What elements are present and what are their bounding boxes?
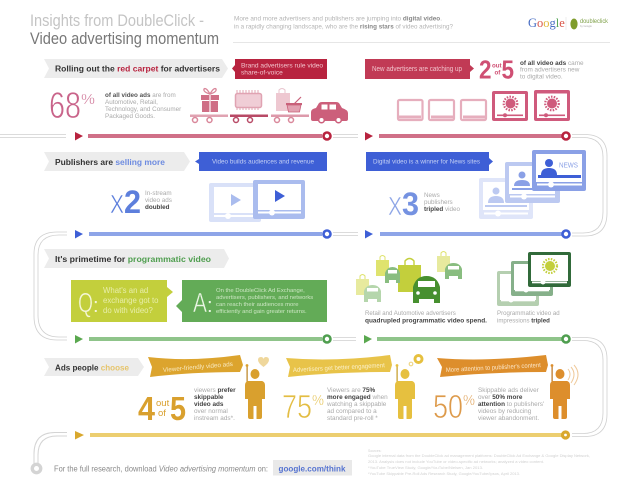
text: viewers more engaged: ad compared to a: [327, 408, 377, 415]
callout: news sites: Digital video is a winner for News sites: [373, 158, 481, 166]
text: 68% description: of all video ads are from: [105, 92, 176, 99]
text: skippable ads attention: videos by reducing: [478, 408, 532, 415]
text: viewers prefer: instream ads*.: [194, 415, 235, 422]
stat: 2 out of 5: [479, 54, 514, 84]
stat: 75%: %: [312, 392, 324, 409]
title: Insights from DoubleClick -: [30, 11, 204, 30]
intro text: [234, 16, 453, 30]
text: viewers prefer: skippable: [194, 394, 224, 401]
stat: x3: 3: [402, 186, 419, 222]
text: news publishers tripled: tripled video: [424, 206, 461, 213]
title: Video advertising momentum: [30, 29, 219, 48]
logo: DoubleClick: by Google: [580, 24, 592, 28]
sources: Sources:: [368, 449, 381, 453]
text: skippable ads attention: Skippable ads deliver: [478, 387, 540, 394]
panel: answer: A: [193, 287, 207, 318]
text: skippable ads attention: viewer abandonment.: [478, 415, 539, 422]
intro text: More and more advertisers and publishers are jumping into digital video.: [234, 16, 442, 22]
callout: new advertisers: [365, 59, 474, 79]
timeline: section 1: [75, 132, 570, 140]
logo: DoubleClick: [566, 17, 609, 30]
text: viewers more engaged: standard pre-roll *: [327, 415, 378, 422]
text: 2 out of 5 description: from advertisers new: [520, 66, 580, 74]
text: viewers prefer: viewers prefer: [194, 387, 236, 394]
banner: viewer-friendly: Viewer-friendly video ads: [163, 361, 233, 374]
text: impressions tripled: Programmatic video ad: [497, 310, 560, 317]
text: skippable ads attention: over 50% more: [478, 394, 523, 401]
end connector: [32, 432, 67, 473]
icon: person with gear: [395, 356, 422, 419]
icon: programmatic screens: [497, 252, 571, 306]
callout: news sites: [366, 152, 493, 171]
icon: person with sound waves: [550, 364, 578, 419]
text: impressions tripled: [497, 310, 560, 324]
callout: video builds audiences: Video builds audiences and revenue: [212, 158, 314, 166]
section 2 heading ribbon: [44, 152, 190, 171]
stat: x2: 2: [124, 184, 141, 220]
icon: news screens: [479, 150, 586, 219]
text: viewers more engaged: [326, 387, 388, 422]
banner: more attention: [437, 355, 548, 377]
text: in-stream doubled: video ads: [145, 197, 172, 204]
text: viewers prefer: video ads: [194, 401, 224, 408]
link: google.com/think: google.com/think: [278, 464, 346, 474]
panel: question: do with video?: [103, 306, 154, 315]
text: skippable ads attention: attention to publishers': [478, 401, 544, 408]
icon: gift on conveyor: [190, 89, 228, 122]
stat: 50%: %: [463, 392, 475, 409]
stat: 68%: %: [81, 91, 95, 108]
callout: brand advertisers: [232, 59, 327, 79]
panel: answer: advertisers, publishers, and networks: [216, 295, 313, 301]
stat: 4 out of 5: [138, 390, 186, 427]
timeline: section 3: [75, 335, 570, 344]
text: 2 out of 5 description: of all video ads came: [520, 60, 584, 67]
text: 2 out of 5 description: [520, 60, 584, 80]
text: quadrupled programmatic spend: [365, 310, 487, 324]
sources: Google internal data from the DoubleClick ad management platforms: DoubleClick Ad Exchange & Google Display Network,: [368, 454, 590, 458]
banner: viewer-friendly: [148, 355, 243, 377]
text: 68% description: Technology, and Consumer: [105, 106, 181, 113]
panel: answer: [176, 280, 327, 322]
panel: answer: can reach their audiences more: [216, 302, 299, 308]
callout: brand advertisers: share-of-voice: [241, 70, 283, 76]
footer call to action: For the full research, download Video advertising momentum on:: [54, 464, 268, 474]
text: skippable ads attention: [478, 387, 544, 422]
text: 2 out of 5 description: to digital video.: [520, 74, 563, 80]
sources: 2013. Analysis does not include YouTube or video-specific ad networks; analyzed a video content.: [368, 460, 544, 464]
section 1 heading ribbon: [44, 59, 228, 78]
text: in-stream doubled: [145, 190, 172, 211]
stat: 2 out of 5: 2: [479, 54, 492, 84]
sources: [368, 449, 590, 476]
stat: 4 out of 5: of: [158, 408, 166, 419]
banner: more attention: More attention to publisher's content: [446, 362, 541, 374]
stat: x2: [110, 184, 141, 220]
panel: question: :: [93, 295, 99, 317]
sources: *YouTube TrueView Study, Google/YouTube/Nielsen, Jan 2013.: [368, 466, 483, 470]
panel: question: [71, 280, 173, 322]
text: viewers more engaged: watching a skippable: [326, 401, 387, 408]
stat: 2 out of 5: out: [492, 62, 502, 70]
text: in-stream doubled: In-stream: [145, 190, 172, 197]
callout: brand advertisers: Brand advertisers rule video: [241, 62, 323, 70]
section 4 heading ribbon: Ads people choose: [55, 362, 129, 372]
stat: x2: X: [110, 189, 124, 219]
icon: person with heart: [245, 357, 269, 419]
intro text: in a rapidly changing landscape, who are the rising stars of video advertising?: [234, 24, 453, 30]
section 3 heading ribbon: [44, 249, 229, 268]
text: quadrupled programmatic spend: Retail and Automotive advertisers: [365, 310, 456, 317]
icon: shopping bags and cars: [356, 252, 462, 303]
text: viewers prefer: [194, 387, 236, 422]
stat: 75%: 75: [282, 388, 312, 425]
banner: better engagement: [286, 355, 392, 377]
text: quadrupled programmatic spend: quadrupled programmatic video spend.: [365, 318, 487, 324]
stat: x3: [388, 186, 419, 222]
timeline: section 4: [75, 431, 568, 440]
title: [30, 11, 219, 48]
text: impressions tripled: impressions tripled: [497, 318, 550, 324]
text: news publishers tripled: [424, 192, 461, 213]
callout: video builds audiences: [195, 152, 327, 171]
text: 68% description: [105, 92, 181, 120]
text: viewers prefer: over normal: [194, 408, 228, 415]
stat: 4 out of 5: 4: [138, 390, 156, 427]
panel: question: exchange got to: [103, 296, 159, 305]
stat: 2 out of 5: of: [494, 70, 501, 76]
icon: chip on conveyor: [230, 90, 268, 122]
stat: 4 out of 5: 5: [170, 390, 186, 427]
icon: shopping bag and basket on conveyor: [271, 88, 309, 122]
timeline: section 2: [75, 230, 570, 238]
stat: 68%: 68: [49, 85, 81, 126]
text: 68% description: Packaged Goods.: [105, 113, 155, 120]
stat: 50%: 50: [433, 388, 463, 425]
section 1 heading ribbon: Rolling out the red carpet for advertisers: [55, 64, 220, 74]
icon: two video screens: [209, 180, 305, 222]
icon: news screens: NEWS: [559, 160, 578, 170]
panel: answer: On the DoubleClick Ad Exchange,: [216, 288, 305, 294]
text: news publishers tripled: News: [424, 192, 440, 199]
panel: answer: :: [207, 295, 213, 317]
section 2 heading ribbon: Publishers are selling more: [55, 157, 165, 167]
section 4 heading ribbon: [44, 358, 144, 376]
panel: question: Q: [78, 287, 93, 318]
text: 68% description: Automotive, Retail,: [105, 99, 158, 106]
text: viewers more engaged: more engaged when: [327, 394, 388, 401]
stat: 2 out of 5: 5: [502, 54, 514, 84]
logo: Google: Google: [528, 16, 565, 30]
panel: question: What's an ad: [103, 286, 148, 295]
link: google.com/think: [273, 460, 352, 476]
section 3 heading ribbon: It's primetime for programmatic video: [55, 254, 211, 264]
stat: 4 out of 5: out: [156, 398, 170, 409]
sources: *YouTube Skippable Pre-Roll Ads Research Study, Google/YouTube/Ipsos, April 2013.: [368, 472, 520, 476]
text: news publishers tripled: publishers: [424, 199, 453, 206]
text: in-stream doubled: doubled: [145, 204, 170, 211]
icon: screens, three light and two highlighted: [398, 90, 570, 121]
stat: x3: X: [388, 191, 402, 221]
text: viewers more engaged: Viewers are 75%: [327, 387, 376, 394]
connector lines: [0, 134, 607, 436]
panel: answer: efficiently and gain greater returns.: [216, 309, 307, 315]
logo: DoubleClick: doubleclick: [580, 18, 609, 25]
banner: better engagement: Advertisers get better engagement: [293, 362, 385, 374]
callout: new advertisers: New advertisers are catching up: [372, 66, 462, 73]
icon: car: [311, 102, 348, 123]
